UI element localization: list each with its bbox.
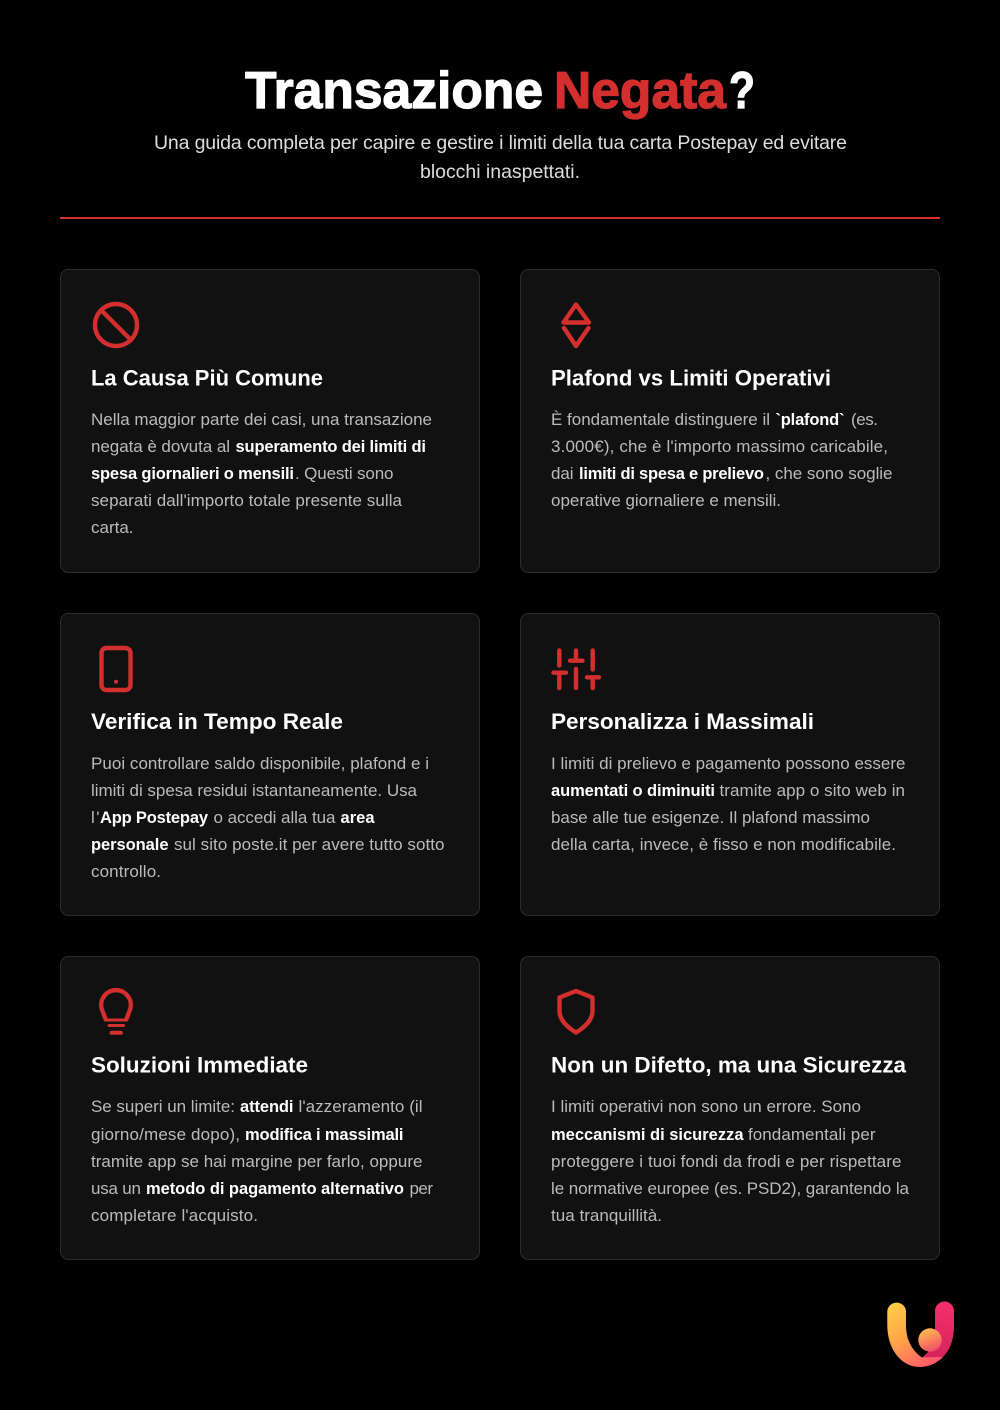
text: la causa più comune: superamento dei limiti di: [236, 438, 426, 456]
icon: ban: [95, 304, 137, 346]
title: Transazione: [245, 62, 543, 120]
text: soluzioni immediate: [91, 1097, 433, 1225]
text: soluzioni immediate: usa un: [91, 1179, 141, 1198]
subtitle: blocchi inaspettati.: [420, 161, 580, 183]
text: la causa più comune: . Questi sono: [295, 464, 394, 483]
heading: non un difetto, ma una sicurezza: Non un Difetto, ma una Sicurezza: [551, 1052, 906, 1078]
icon: shield: [560, 991, 592, 1032]
text: plafond vs limiti operativi: , che sono soglie: [766, 464, 892, 483]
text: plafond vs limiti operativi: (es.: [851, 410, 878, 429]
text: plafond vs limiti operativi: `plafond`: [776, 411, 844, 429]
text: personalizza i massimali: base alle tue esigenze. Il plafond massimo: [551, 808, 870, 827]
text: verifica in tempo reale: o accedi alla tua: [214, 808, 336, 827]
text: verifica in tempo reale: area: [340, 809, 375, 827]
text: non un difetto, ma una sicurezza: proteggere i tuoi fondi da frodi e per rispettare: [551, 1152, 902, 1171]
text: soluzioni immediate: giorno/mese dopo),: [91, 1125, 240, 1144]
text: non un difetto, ma una sicurezza: fondamentali per: [748, 1125, 876, 1144]
text: verifica in tempo reale: limiti di spesa residui istantaneamente. Usa: [91, 781, 418, 800]
icon: diamond: [564, 304, 589, 346]
title: [245, 62, 755, 120]
icon: light bulb: [101, 990, 131, 1033]
text: verifica in tempo reale: [91, 754, 444, 881]
text: soluzioni immediate: Se superi un limite:: [91, 1097, 235, 1116]
text: la causa più comune: spesa giornalieri o mensili: [91, 465, 294, 483]
text: soluzioni immediate: l'azzeramento (il: [298, 1097, 422, 1116]
icon: phone: [102, 648, 130, 690]
text: la causa più comune: Nella maggior parte dei casi, una transazione: [91, 410, 432, 429]
text: personalizza i massimali: tramite app o sito web in: [720, 781, 905, 800]
text: personalizza i massimali: della carta, invece, è fisso e non modificabile.: [551, 835, 896, 854]
heading: la causa più comune: La Causa Più Comune: [91, 366, 323, 390]
text: la causa più comune: negata è dovuta al: [91, 437, 230, 456]
text: plafond vs limiti operativi: operative giornaliere e mensili.: [551, 491, 781, 510]
text: soluzioni immediate: modifica i massimali: [245, 1126, 404, 1144]
panel: plafond vs limiti operativi: [520, 270, 940, 572]
text: soluzioni immediate: tramite app se hai margine per farlo, oppure: [91, 1152, 422, 1171]
text: verifica in tempo reale: l': [91, 808, 100, 827]
icon: sliders: [554, 650, 599, 688]
text: verifica in tempo reale: controllo.: [91, 862, 161, 881]
text: verifica in tempo reale: sul sito poste.it per avere tutto sotto: [174, 835, 444, 854]
text: soluzioni immediate: metodo di pagamento alternativo: [146, 1180, 404, 1198]
text: soluzioni immediate: attendi: [240, 1098, 294, 1116]
text: plafond vs limiti operativi: È fondamentale distinguere il: [551, 410, 770, 429]
text: plafond vs limiti operativi: 3.000€), che è l'importo massimo caricabile,: [551, 437, 888, 456]
text: personalizza i massimali: [551, 754, 906, 854]
text: verifica in tempo reale: Puoi controllare saldo disponibile, plafond e i: [91, 754, 429, 773]
text: non un difetto, ma una sicurezza: le normative europee (es. PSD2), garantendo la: [551, 1179, 910, 1198]
text: verifica in tempo reale: personale: [91, 836, 168, 854]
logo: [887, 1302, 954, 1367]
title: ?: [729, 62, 755, 120]
panel: non un difetto, ma una sicurezza: [520, 956, 940, 1260]
text: soluzioni immediate: per: [410, 1179, 433, 1198]
panel: personalizza i massimali: [520, 614, 940, 916]
heading: verifica in tempo reale: Verifica in Tempo Reale: [91, 709, 343, 734]
text: non un difetto, ma una sicurezza: I limiti operativi non sono un errore. Sono: [551, 1097, 861, 1116]
text: personalizza i massimali: I limiti di prelievo e pagamento possono essere: [551, 754, 906, 773]
panel: verifica in tempo reale: [60, 614, 480, 916]
panel: la causa più comune: [60, 270, 480, 572]
text: verifica in tempo reale: App Postepay: [100, 809, 209, 827]
heading: soluzioni immediate: Soluzioni Immediate: [91, 1052, 308, 1078]
text: la causa più comune: separati dall'importo totale presente sulla: [91, 491, 403, 510]
subtitle: Una guida completa per capire e gestire i limiti della tua carta Postepay ed evitare: [154, 132, 847, 154]
text: plafond vs limiti operativi: dai: [551, 464, 574, 483]
text: non un difetto, ma una sicurezza: [551, 1097, 910, 1225]
text: la causa più comune: [91, 410, 432, 537]
text: non un difetto, ma una sicurezza: tua tranquillità.: [551, 1206, 662, 1225]
text: soluzioni immediate: completare l'acquisto.: [91, 1206, 258, 1225]
text: la causa più comune: carta.: [91, 518, 134, 537]
text: plafond vs limiti operativi: limiti di spesa e prelievo: [579, 465, 764, 483]
text: plafond vs limiti operativi: [551, 410, 892, 510]
text: non un difetto, ma una sicurezza: meccanismi di sicurezza: [551, 1126, 744, 1144]
heading: plafond vs limiti operativi: Plafond vs Limiti Operativi: [551, 366, 831, 390]
subtitle: [154, 132, 847, 183]
heading: personalizza i massimali: Personalizza i Massimali: [551, 709, 814, 734]
panel: soluzioni immediate: [60, 956, 480, 1260]
title: Negata: [554, 62, 727, 120]
text: personalizza i massimali: aumentati o diminuiti: [551, 782, 715, 800]
